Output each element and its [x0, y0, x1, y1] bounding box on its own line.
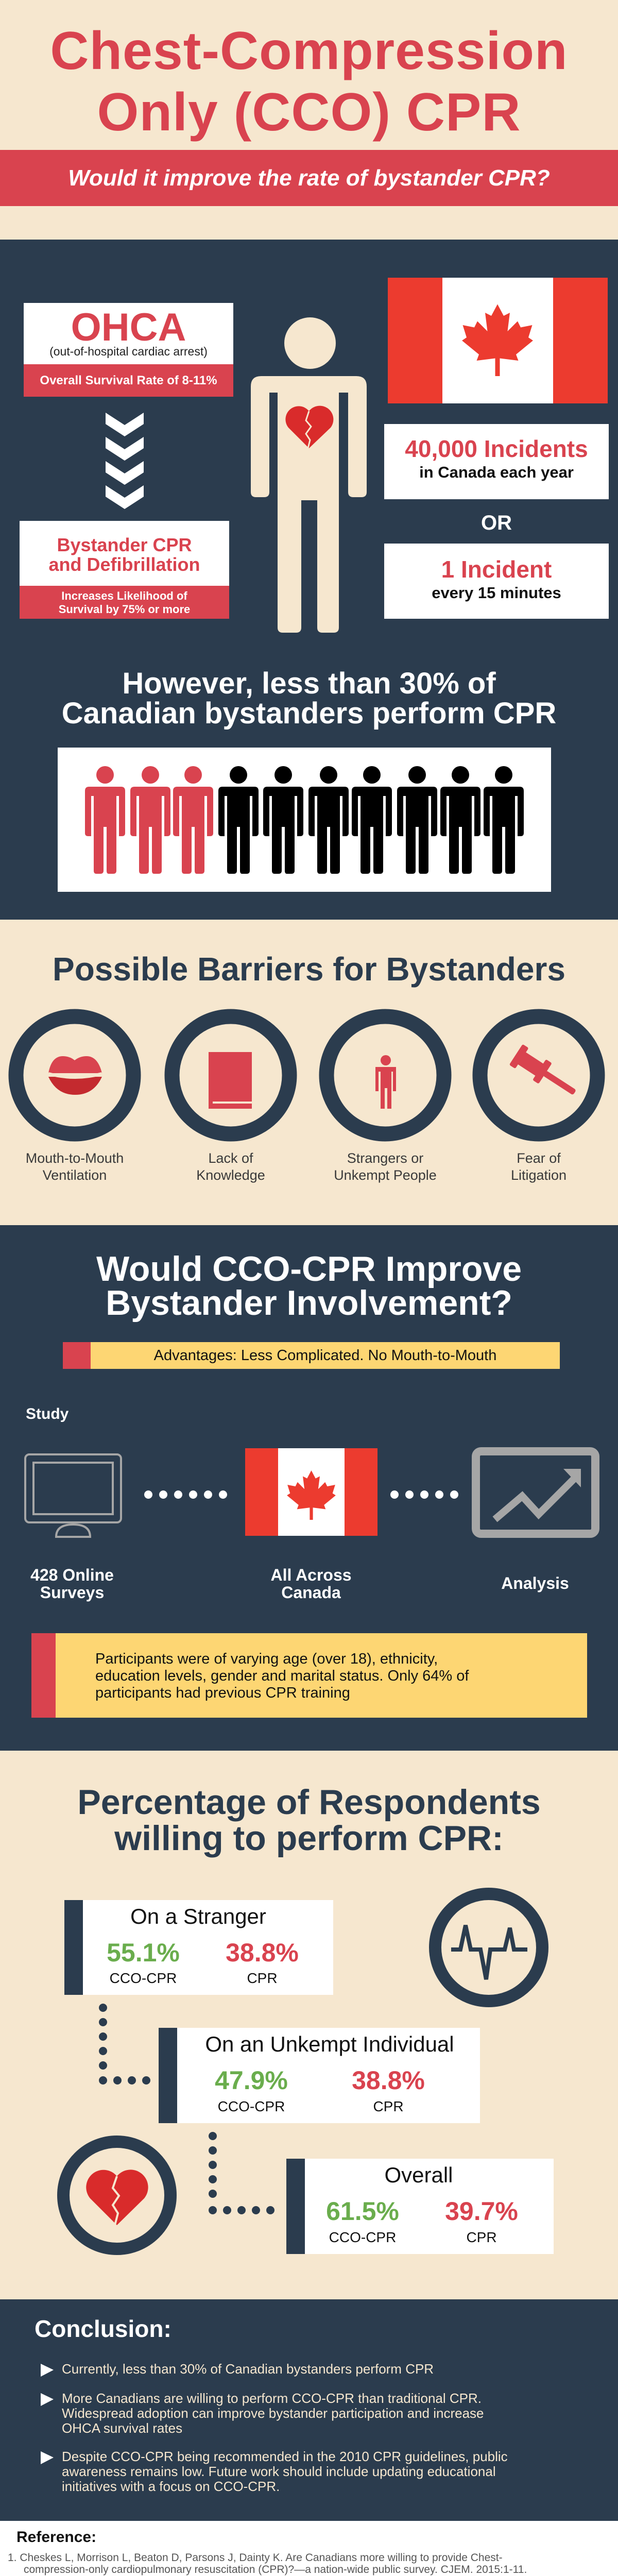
callout: participants: participants had previous CPR training: [95, 1685, 350, 1701]
callout: 1 incident every 15 minutes: every 15 minutes: [432, 584, 561, 602]
study labels: Surveys: [40, 1583, 104, 1602]
reference text: [8, 2552, 527, 2575]
stat box: on a stranger: On a Stranger: [130, 1904, 266, 1928]
callout: 40,000 incidents: [384, 424, 609, 499]
text: All Across: [270, 1566, 352, 1584]
bystander heading: Bystander CPR: [57, 534, 192, 555]
conclusion bullets: [41, 2361, 508, 2494]
icon: monitor: [24, 1453, 122, 1538]
bullet 3: initiatives with a focus on CCO-CPR.: [62, 2479, 280, 2494]
callout: participants: [31, 1633, 587, 1718]
reference text: 1. Cheskes L, Morrison L, Beaton D, Parsons J, Dainty K. Are Canadians more willing to provide Chest-: [8, 2552, 503, 2564]
stat box: unkempt individual: 47.9%: [215, 2066, 288, 2095]
icon: person with broken heart: [251, 317, 367, 633]
background: navy band conclusion: [0, 2299, 618, 2521]
heading: possible barriers: Possible Barriers for Bystanders: [53, 951, 565, 988]
barrier labels: Mouth-to-Mouth: [26, 1150, 124, 1166]
dots connector: unkempt to overall: [209, 2132, 274, 2214]
icon: broken heart circle: [57, 2136, 177, 2255]
survival rate band: Overall Survival Rate of 8-11%: [40, 374, 217, 387]
callout: 40,000 incidents: in Canada each year: [419, 463, 574, 481]
callout: 1 incident every 15 minutes: [384, 544, 609, 619]
stat box: on a stranger: CCO-CPR: [110, 1970, 177, 1986]
stat box: on a stranger: 38.8%: [226, 1938, 299, 1967]
OHCA heading: OHCA: [71, 306, 186, 349]
barrier labels: Strangers or: [347, 1150, 423, 1166]
icon: chevrons down: [106, 413, 144, 509]
barrier labels: Knowledge: [196, 1167, 265, 1183]
heading: conclusion: Conclusion:: [35, 2315, 171, 2342]
survival increase band: Increases Likelihood of: [61, 589, 187, 602]
barrier labels: Lack of: [208, 1150, 253, 1166]
background: navy band 2: [0, 1225, 618, 1751]
icon: gavel: [509, 1044, 581, 1103]
callout: advantages: Advantages: Less Complicated. No Mouth-to-Mouth: [154, 1347, 496, 1364]
subtitle banner: [0, 150, 618, 206]
heading: less than 30%: [62, 667, 556, 730]
survival increase band: [20, 586, 229, 619]
text: Analysis: [501, 1574, 569, 1592]
barrier labels: Ventilation: [43, 1167, 107, 1183]
reference text: compression-only cardiopulmonary resuscitation (CPR)?—a nation-wide public survey. CJEM. 2015:1-11.: [24, 2564, 527, 2575]
heading: less than 30%: However, less than 30% of: [122, 667, 496, 700]
callout: advantages: [63, 1342, 560, 1369]
heading: percentage of respondents: Percentage of Respondents: [77, 1783, 541, 1822]
label: study: Study: [26, 1405, 68, 1422]
study labels: 428 Online: [30, 1566, 114, 1584]
bullet 3: [41, 2449, 508, 2494]
barrier labels: Fear of: [517, 1150, 561, 1166]
chart: 3 of 10 people: [58, 748, 551, 892]
stat box: unkempt individual: CCO-CPR: [218, 2098, 285, 2114]
callout: 1 incident every 15 minutes: 1 Incident: [441, 556, 552, 583]
heading: would CCO-CPR improve: Bystander Involvement?: [106, 1283, 512, 1323]
icon: Canadian flag: [388, 278, 608, 403]
OR label: OR: [481, 512, 512, 534]
stat box: overall: 39.7%: [445, 2197, 518, 2226]
title: [50, 21, 568, 142]
bullet 2: Widespread adoption can improve bystander participation and increase: [62, 2405, 484, 2421]
OHCA definition: (out-of-hospital cardiac arrest): [49, 345, 208, 358]
bullet 3: awareness remains low. Future work should include updating educational: [62, 2464, 496, 2479]
icon: small Canadian flag: [245, 1448, 377, 1536]
bullet 2: More Canadians are willing to perform CCO-CPR than traditional CPR.: [62, 2391, 482, 2406]
stat box: overall: CCO-CPR: [329, 2229, 396, 2245]
study labels: [30, 1566, 114, 1602]
bullet 2: OHCA survival rates: [62, 2420, 182, 2436]
stat box: unkempt individual: 38.8%: [352, 2066, 425, 2095]
subtitle banner: Would it improve the rate of bystander CPR?: [68, 165, 550, 191]
dots connector 1: [144, 1490, 227, 1499]
barrier labels: Litigation: [511, 1167, 566, 1183]
heading: would CCO-CPR improve: [96, 1249, 522, 1323]
survival increase band: Survival by 75% or more: [59, 603, 190, 616]
panel: OHCA box: [24, 303, 233, 397]
heading: less than 30%: Canadian bystanders perform CPR: [62, 697, 556, 730]
broken heart: [285, 406, 333, 448]
bullet 2: [41, 2391, 484, 2436]
survival rate band: [24, 364, 233, 397]
stat box: unkempt individual: On an Unkempt Individual: [205, 2032, 454, 2056]
stat box: unkempt individual: [159, 2028, 480, 2123]
bystander heading: [48, 534, 200, 575]
panel: barrier icons: [8, 1009, 605, 1142]
stat box: overall: Overall: [384, 2163, 453, 2187]
stat box: on a stranger: [64, 1900, 333, 1995]
icon: ECG circle: [429, 1888, 548, 2007]
stat box: overall: CPR: [466, 2229, 497, 2245]
title: Only (CCO) CPR: [97, 82, 521, 142]
heading: reference: Reference:: [16, 2529, 96, 2546]
icon: lips: [48, 1056, 102, 1095]
dots connector 2: [390, 1490, 458, 1499]
stat box: on a stranger: CPR: [247, 1970, 278, 1986]
icon: analysis chart: [472, 1447, 599, 1538]
title: Chest-Compression: [50, 21, 568, 81]
background: navy band 1: [0, 240, 618, 920]
heading: percentage of respondents: willing to perform CPR:: [114, 1819, 504, 1858]
dots connector: stranger to unkempt: [99, 2004, 150, 2084]
stat box: overall: [286, 2159, 554, 2254]
background: white footer: [0, 2521, 618, 2576]
callout: 40,000 incidents: 40,000 Incidents: [405, 435, 588, 462]
bystander heading: and Defibrillation: [48, 554, 200, 575]
stat box: unkempt individual: CPR: [373, 2098, 404, 2114]
callout: participants: education levels, gender and marital status. Only 64% of: [95, 1668, 469, 1684]
icon: book: [209, 1052, 252, 1109]
icon: stranger: [375, 1055, 396, 1109]
barrier labels: Unkempt People: [334, 1167, 437, 1183]
callout: participants: Participants were of varying age (over 18), ethnicity,: [95, 1651, 438, 1667]
bullet 3: Despite CCO-CPR being recommended in the 2010 CPR guidelines, public: [62, 2449, 508, 2464]
stat box: on a stranger: 55.1%: [107, 1938, 180, 1967]
barrier labels: [26, 1150, 566, 1183]
bullet 1: Currently, less than 30% of Canadian bystanders perform CPR: [62, 2361, 434, 2377]
heading: would CCO-CPR improve: Would CCO-CPR Improve: [96, 1249, 522, 1289]
heading: percentage of respondents: [77, 1783, 541, 1858]
text: Canada: [281, 1583, 341, 1602]
stat box: overall: 61.5%: [326, 2197, 399, 2226]
panel: bystander CPR box: [20, 521, 229, 619]
